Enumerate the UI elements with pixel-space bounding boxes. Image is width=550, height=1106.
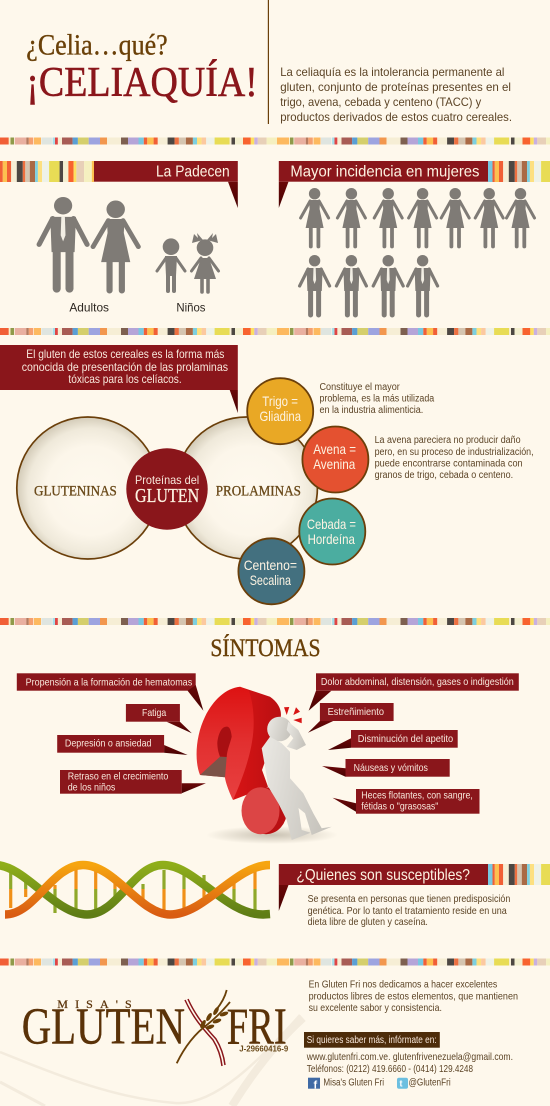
icon: man adult [39, 197, 87, 289]
text: about gluten fri [309, 978, 518, 1014]
symptom: nauseas [322, 759, 450, 777]
text: about gluten fri: En Gluten Fri nos dedicamos a hacer excelentes [309, 978, 497, 990]
intro paragraph [280, 65, 512, 124]
note: avena: puede encontrarse contaminada con [375, 458, 523, 470]
symptom: fatiga [126, 704, 192, 733]
icons: seven women [301, 188, 534, 246]
circle: trigo: Trigo = [262, 393, 298, 409]
white figure [262, 717, 332, 840]
symptom: depresion: Depresión o ansiedad [65, 738, 152, 750]
logo: fri: FRI [227, 998, 287, 1055]
intro paragraph: productos derivados de estos cuatro cereales. [280, 110, 512, 124]
symptom: estrenimiento: Estreñimiento [328, 706, 384, 718]
icon: facebook: f [314, 1080, 318, 1092]
label: ninos: Niños [176, 300, 206, 314]
circle: avena: Avenina [313, 456, 355, 472]
note: trigo: en la industria alimenticia. [320, 405, 423, 416]
callout: gluten [0, 345, 238, 413]
pain marks [284, 707, 302, 723]
callout: gluten: tóxicas para los celíacos. [68, 372, 182, 386]
logo: wheat [177, 990, 230, 1066]
note: avena: granos de trigo, cebada o centeno. [375, 470, 513, 481]
contact: phones: Teléfonos: (0212) 419.6660 - (0414) 129.4248 [307, 1063, 473, 1075]
banner: la padecen: La Padecen [156, 164, 230, 181]
stripe divider 4 [0, 958, 550, 966]
symptom: heces: Heces flotantes, con sangre, [361, 790, 473, 802]
note: trigo: Constituye el mayor [320, 382, 400, 393]
icon: woman adult [93, 200, 138, 291]
stripe divider 3 [0, 618, 550, 625]
icon: facebook [308, 1078, 320, 1092]
banner: la padecen [0, 161, 238, 208]
circle: cebada: Cebada = [307, 516, 356, 532]
logo: rif number: J-29660416-9 [239, 1045, 289, 1054]
symptom: heces: fétidas o "grasosas" [361, 800, 439, 812]
symptom: retraso: de los niños [68, 782, 115, 794]
circle: centeno: Secalina [250, 572, 291, 588]
circle: gluteninas [17, 417, 159, 559]
symptom: dolor: Dolor abdominal, distensión, gases o indigestión [321, 676, 514, 688]
symptom: hematomas: Propensión a la formación de hematomas [26, 677, 192, 689]
contact details [306, 1051, 513, 1092]
banner: susceptibles [279, 864, 550, 911]
note: avena [375, 435, 534, 481]
text: susceptibles: genética. Por lo tanto el tratamiento reside en una [308, 905, 507, 917]
text: about gluten fri: productos libres de estos elementos, que mantienen [309, 990, 518, 1002]
callout: gluten: conocida de presentación de las prolaminas [22, 360, 228, 374]
callout: si quieres saber mas [304, 1032, 440, 1048]
callout: si quieres saber mas: Si quieres saber más, infórmate en: [307, 1035, 437, 1046]
text: about gluten fri: su excelente sabor y consistencia. [309, 1002, 442, 1014]
circle: trigo [247, 378, 313, 444]
dna rungs [11, 867, 255, 913]
note: avena: La avena pareciera no producir daño [375, 435, 521, 446]
panel: la padecen [0, 161, 238, 314]
circle: cebada: Hordeína [308, 531, 355, 547]
symptom: retraso [60, 770, 206, 794]
stripe divider 2 [0, 328, 550, 335]
question mark dot [242, 787, 287, 834]
symptoms left [17, 673, 206, 794]
heading: sintomas: SÍNTOMAS [210, 634, 321, 662]
symptom: apetito [328, 730, 458, 750]
circle: centeno: Centeno= [244, 557, 297, 573]
symptoms right [308, 673, 519, 814]
circle: proteinas del gluten: GLUTEN [135, 485, 199, 507]
banner: susceptibles: ¿Quienes son susceptibles? [296, 867, 470, 884]
text: susceptibles: dieta libre de gluten y caseína. [308, 916, 428, 928]
text: susceptibles: Se presenta en personas que tienen predisposición [308, 893, 510, 905]
title line: question: ¿Celia…qué? [26, 28, 168, 62]
icon: twitter [397, 1078, 408, 1089]
floor shadow [206, 826, 338, 844]
title [26, 28, 258, 106]
intro paragraph: gluten, conjunto de proteínas presentes en el [280, 80, 511, 94]
panel: quienes son susceptibles [279, 864, 550, 928]
stripe divider 1 [0, 138, 550, 144]
intro paragraph: trigo, avena, cebada y centeno (TACC) y [280, 95, 481, 109]
panel: proteinas del gluten [0, 345, 534, 604]
symptom: apetito: Disminución del apetito [358, 733, 453, 745]
symptom: retraso: Retraso en el crecimiento [68, 770, 168, 782]
callout: gluten: El gluten de estos cereales es la forma más [26, 347, 224, 361]
symptom: nauseas: Náuseas y vómitos [354, 762, 428, 774]
symptom: fatiga: Fatiga [142, 707, 166, 719]
banner: mayor incidencia: Mayor incidencia en mujeres [290, 164, 480, 181]
green strand [0, 865, 270, 914]
circle: proteinas del gluten: Proteínas del [135, 473, 199, 487]
contact: twitter: @GlutenFri [409, 1078, 451, 1089]
contact: facebook: Misa's Gluten Fri [323, 1078, 384, 1089]
circle: avena: Avena = [313, 441, 356, 457]
circle: prolaminas [175, 417, 317, 559]
circle: prolaminas: PROLAMINAS [216, 484, 301, 500]
symptom: estrenimiento [308, 703, 394, 733]
text: susceptibles [308, 893, 510, 928]
note: trigo: problema, es la más utilizada [320, 394, 435, 404]
symptom: heces [332, 789, 480, 814]
circle: trigo: Gliadina [260, 408, 301, 424]
question mark hook [197, 687, 281, 800]
vertical divider [268, 0, 269, 124]
symptom: depresion [57, 735, 188, 755]
icon: boy [157, 238, 185, 291]
illustration: question mark with figure [197, 687, 338, 844]
banner: mayor incidencia [279, 161, 550, 208]
icon: twitter: t [400, 1079, 402, 1089]
orange strand [5, 865, 270, 914]
symptom: hematomas [17, 673, 203, 711]
icons: four men [300, 255, 438, 315]
icon: girl [192, 233, 218, 292]
logo: misa's: MISA'S [57, 997, 132, 1011]
panel: mayor incidencia en mujeres [279, 161, 550, 315]
background swooshes [0, 1015, 303, 1106]
note: trigo [320, 382, 435, 416]
note: avena: pero, en su proceso de industrialización, [375, 447, 534, 458]
circle: proteinas del gluten [126, 448, 208, 530]
circle: gluteninas: GLUTENINAS [34, 484, 117, 500]
intro paragraph: La celiaquía es la intolerancia permanente al [280, 65, 504, 79]
illustration: dna helix [0, 865, 270, 914]
circle: centeno [238, 538, 304, 604]
logo: gluten: GLUTEN [22, 998, 185, 1055]
circle: avena [302, 426, 368, 492]
symptom: dolor [309, 673, 519, 711]
title line: celiaquia: ¡CELIAQUÍA! [26, 59, 258, 106]
label: adultos: Adultos [69, 300, 109, 314]
logo: misa's gluten fri [22, 990, 289, 1066]
circle: cebada [299, 498, 365, 564]
